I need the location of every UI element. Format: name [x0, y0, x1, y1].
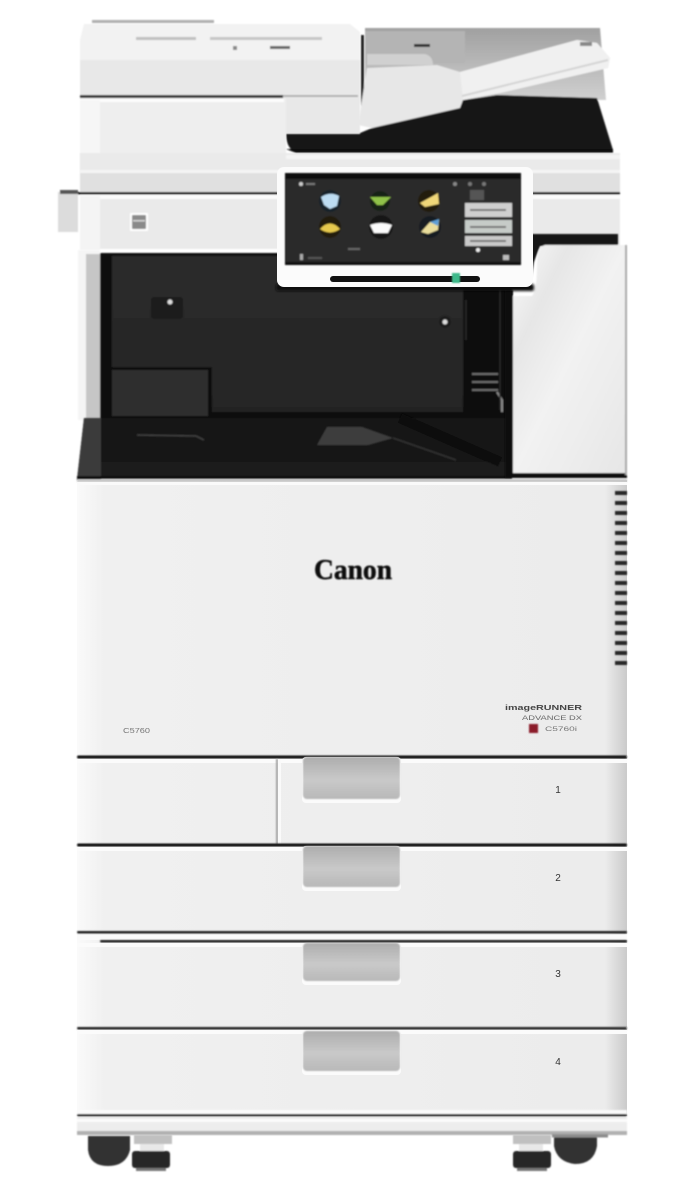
product name: ADVANCE DX — [522, 715, 583, 722]
cassette 4 — [77, 1027, 627, 1116]
right wheel — [554, 1137, 597, 1164]
right foot — [513, 1135, 551, 1171]
right side cover — [505, 234, 627, 478]
left wheel — [88, 1136, 130, 1166]
control panel — [276, 167, 534, 291]
cassette 3: 3 — [555, 969, 561, 980]
brand logo: Canon — [314, 555, 392, 586]
cassette 3 — [77, 931, 627, 1027]
output bay — [78, 250, 512, 420]
side tab — [58, 192, 78, 232]
card reader icon — [130, 213, 148, 231]
paper guide — [367, 54, 433, 65]
output slot — [286, 95, 613, 153]
feeder tray — [358, 40, 610, 128]
product name — [505, 705, 583, 733]
document feeder — [286, 28, 613, 153]
indicator bar — [330, 276, 480, 282]
cassette 2 — [77, 844, 627, 932]
left foot — [132, 1135, 172, 1171]
screen side buttons — [465, 203, 512, 217]
vent slots — [615, 488, 627, 665]
screen icons — [319, 190, 341, 212]
black document tray — [77, 418, 512, 480]
drawers and cassettes — [77, 756, 627, 1116]
cassette 4: 4 — [555, 1057, 561, 1068]
touch screen — [285, 173, 521, 265]
left model label: C5760 — [123, 728, 150, 735]
scanner top housing — [80, 20, 360, 173]
cassette 2: 2 — [555, 873, 561, 884]
body upper band — [58, 153, 620, 250]
product name: imageRUNNER — [505, 705, 582, 712]
base plinth — [77, 1110, 627, 1135]
main front panel — [77, 479, 627, 756]
cassette 1: 1 — [555, 785, 561, 796]
casters and feet — [88, 1134, 608, 1171]
product name: C5760i — [545, 727, 577, 733]
cassette 1 — [77, 756, 627, 845]
